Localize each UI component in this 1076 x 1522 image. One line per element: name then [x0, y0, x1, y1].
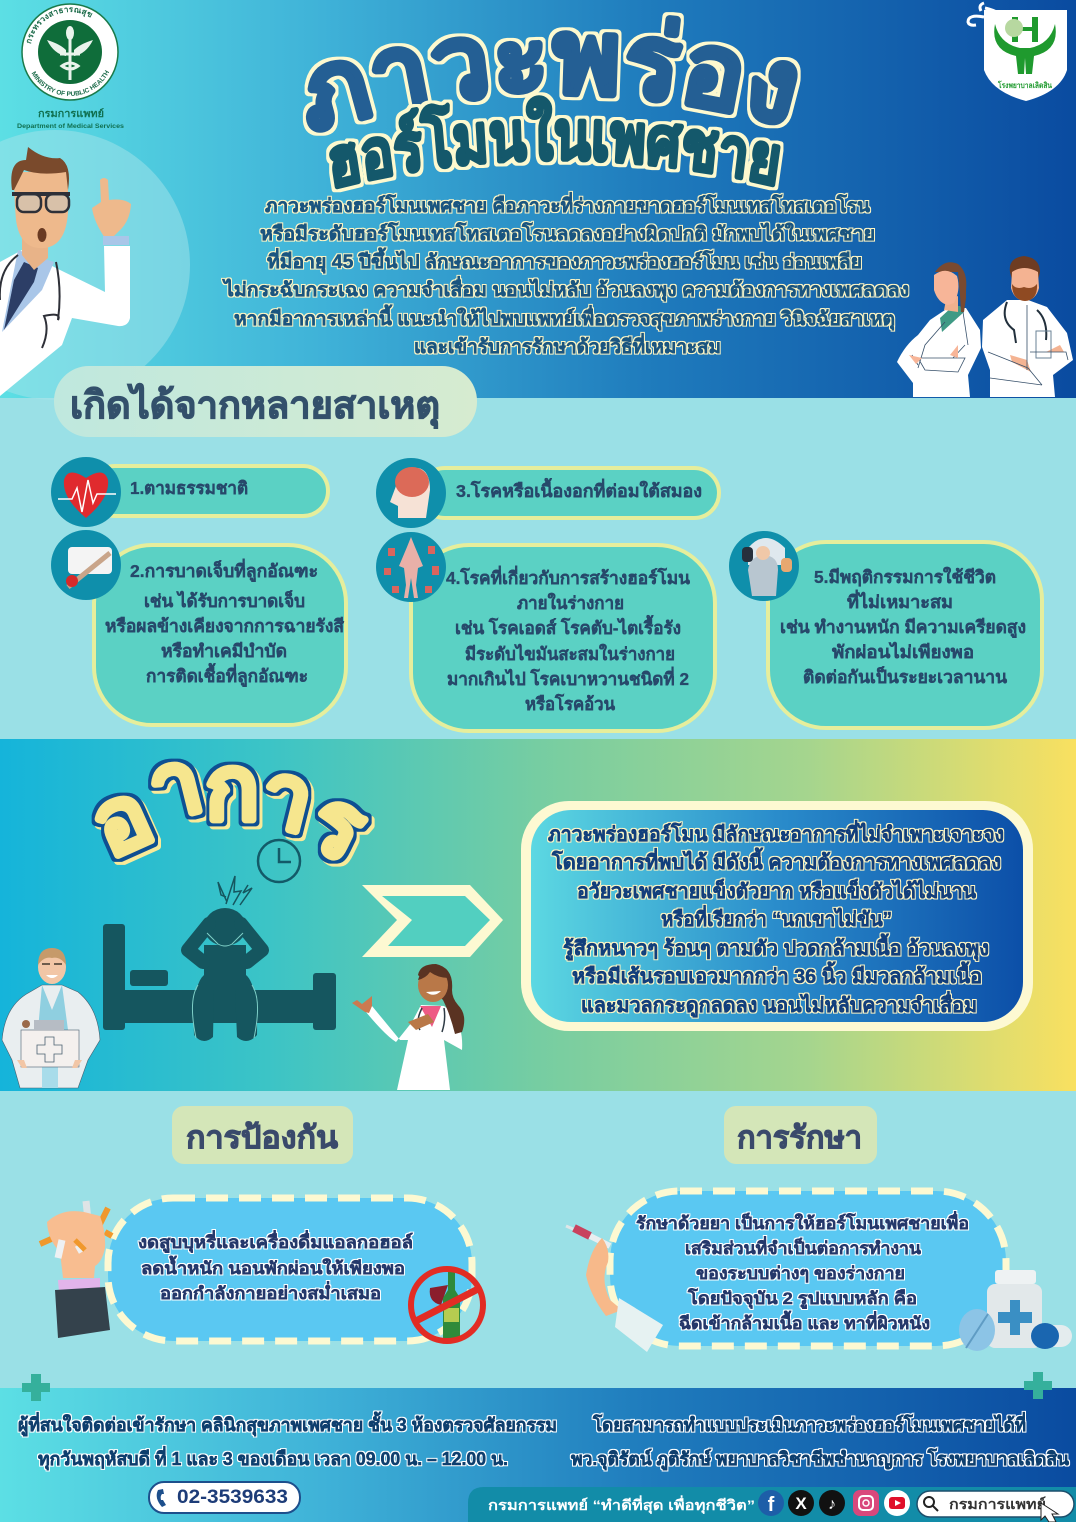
illustration: medicine bottle and pills [959, 1270, 1072, 1351]
title: main heading: ภาวะพร่อง [302, 12, 801, 136]
text block: contact details: ผู้ที่สนใจติดต่อเข้ารักษา คลินิกสุขภาพเพศชาย ชั้น 3 ห้องตรวจศัลยกรรม [18, 1411, 557, 1437]
text block: assessment contact: พว.จุติรัตน์ ภูติรักษ์ พยาบาลวิชาชีพชำนาญการ โรงพยาบาลเลิดสิน [571, 1448, 1070, 1471]
icon: plus left [22, 1374, 50, 1401]
panel: cause 1 [51, 457, 328, 527]
title: symptoms arched heading: า [250, 743, 323, 853]
male doctor [982, 256, 1073, 397]
icon: clock [258, 840, 300, 882]
panel: cause 2: หรือผลข้างเคียงจากการฉายรังสี [105, 616, 344, 636]
title: symptoms arched heading: า [139, 731, 212, 840]
heading: prevention: การป้องกัน [186, 1120, 338, 1155]
panel: cause 4 [376, 532, 715, 731]
female doctor [897, 256, 1073, 397]
text block: contact details: ทุกวันพฤหัสบดี ที่ 1 และ 3 ของเดือน เวลา 09.00 น. – 12.00 น. [38, 1446, 508, 1471]
illustration: hand holding syringe [566, 1226, 663, 1352]
icon: hospital shield logo: โรงพยาบาลเลิดสิน [997, 80, 1052, 90]
text block: intro paragraph: หากมีอาการเหล่านี้ แนะนำให้ไปพบแพทย์เพื่อตรวจสุขภาพร่างกาย วินิจฉัยสาเหตุ [234, 304, 895, 331]
callout: phone number: 02-3539633 [177, 1487, 288, 1508]
text block: treatment advice: โดยปัจจุบัน 2 รูปแบบหลัก คือ [687, 1288, 917, 1310]
panel: cause 4: มากเกินไป โรคเบาหวานชนิดที่ 2 [447, 666, 689, 689]
icon: ministry of public health seal [21, 3, 119, 101]
panel: cause 5: 5.มีพฤติกรรมการใช้ชีวิต [814, 566, 996, 587]
text block: assessment contact: โดยสามารถทำแบบประเมินภาวะพร่องฮอร์โมนเพศชายได้ที่ [592, 1412, 1026, 1435]
title: symptoms arched heading [76, 731, 382, 881]
icon: ministry of public health seal: MINISTRY OF PUBLIC HEALTH [32, 70, 110, 96]
text block: prevention advice [138, 1230, 413, 1303]
icon: tiktok: ♪ [828, 1496, 836, 1513]
panel: cause 2 [51, 530, 346, 725]
illustration: doctor pointing up [0, 130, 190, 400]
icon: tiktok [819, 1490, 845, 1516]
text: department name [17, 108, 124, 130]
panel: cause 5: พักผ่อนไม่เพียงพอ [832, 641, 974, 662]
icon: instagram [853, 1490, 879, 1516]
panel: footer background [0, 1388, 1076, 1522]
panel: cause 3 [376, 458, 719, 528]
icon: heartbeat [51, 457, 121, 527]
panel: cause 2: เช่น ได้รับการบาดเจ็บ [144, 589, 305, 611]
panel: symptoms description box [521, 801, 1033, 1031]
panel: cause 2: หรือทำเคมีบำบัด [161, 641, 287, 661]
text block: intro paragraph: และเข้ารับการรักษาด้วยวิธีที่เหมาะสม [414, 333, 721, 358]
text block: treatment advice: เสริมส่วนที่จำเป็นต่อการทำงาน [685, 1236, 921, 1258]
panel: cause 2: 2.การบาดเจ็บที่ลูกอัณฑะ [130, 558, 318, 583]
text block: symptoms description: โดยอาการที่พบได้ มีดังนี้ ความต้องการทางเพศลดลง [551, 847, 1001, 874]
panel: prevention capsule [108, 1198, 472, 1341]
text block: contact details [18, 1411, 557, 1471]
icon: plus right [1024, 1372, 1052, 1399]
text block: treatment advice: ฉีดเข้ากล้ามเนื้อ และ ทาที่ผิวหนัง [679, 1310, 930, 1333]
icon: x [788, 1490, 814, 1516]
title: sub heading: ฮอร์โมนในเพศชาย [326, 92, 784, 192]
arrow: chevron [362, 885, 503, 957]
icon: human anatomy [376, 532, 446, 602]
icon: brain [376, 458, 446, 528]
icon: facebook: f [768, 1494, 775, 1516]
text block: intro paragraph [222, 192, 909, 358]
text: department name: กรมการแพทย์ [38, 108, 104, 120]
heading: causes pill [54, 366, 477, 437]
text block: symptoms description: รู้สึกหนาวๆ ร้อนๆ ตามตัว ปวดกล้ามเนื้อ อ้วนลงพุง [563, 933, 989, 962]
icon: x: X [795, 1494, 807, 1513]
text block: symptoms description: ภาวะพร่องฮอร์โมน มีลักษณะอาการที่ไม่จำเพาะเจาะจง [548, 819, 1004, 846]
panel: social media bar: กรมการแพทย์ “ทำดีที่สุด เพื่อทุกชีวิต” [488, 1495, 755, 1514]
heading: treatment: การรักษา [737, 1120, 862, 1155]
text block: treatment advice: รักษาด้วยยา เป็นการให้ฮอร์โมนเพศชายเพื่อ [636, 1211, 969, 1233]
heading: treatment [724, 1106, 877, 1164]
text block: prevention advice: ออกกำลังกายอย่างสม่ำเสมอ [160, 1281, 381, 1303]
icon: ministry of public health seal: กระทรวงสาธารณสุข [26, 7, 92, 44]
text block: intro paragraph: หรือมีระดับฮอร์โมนเทสโทสเตอโรนลดลงอย่างผิดปกติ มักพบได้ในเพศชาย [260, 222, 875, 245]
panel: social media bar [468, 1487, 1076, 1522]
text block: assessment contact [571, 1412, 1070, 1471]
panel: cause 4: 4.โรคที่เกี่ยวกับการสร้างฮอร์โมน [446, 565, 690, 588]
panel: symptoms background [0, 739, 1076, 1091]
panel: cause 5 [729, 531, 1042, 728]
text block: symptoms description: หรือที่เรียกว่า “นกเขาไม่ขัน” [661, 904, 892, 931]
panel: cause 5: ติดต่อกันเป็นระยะเวลานาน [803, 665, 1007, 687]
text block: symptoms description: หรือมีเส้นรอบเอวมากกว่า 36 นิ้ว มีมวลกล้ามเนื้อ [572, 961, 982, 988]
panel: cause 1: 1.ตามธรรมชาติ [130, 478, 248, 498]
text block: prevention advice: ลดน้ำหนัก นอนพักผ่อนให้เพียงพอ [141, 1255, 405, 1278]
panel: cause 4: ภายในร่างกาย [517, 592, 624, 613]
search box [917, 1491, 1074, 1522]
text block: treatment advice [636, 1211, 969, 1333]
text block: intro paragraph: ไม่กระฉับกระเฉง ความจำเสื่อม นอนไม่หลับ อ้วนลงพุง ความต้องการทางเพศลดลง [222, 276, 909, 302]
panel: cause 5: ที่ไม่เหมาะสม [847, 589, 953, 612]
text block: symptoms description: อวัยวะเพศชายแข็งตัวยาก หรือแข็งตัวได้ไม่นาน [577, 878, 976, 903]
icon: person with masks [729, 531, 799, 601]
panel: cause 4: เช่น โรคเอดส์ โรคตับ-ไตเรื้อรัง [455, 615, 681, 638]
icon: hospital shield logo [968, 3, 1067, 101]
panel: cause 2: การติดเชื้อที่ลูกอัณฑะ [146, 663, 308, 688]
text block: prevention advice: งดสูบบุหรี่และเครื่องดื่มแอลกอฮอล์ [138, 1230, 413, 1254]
title: symptoms arched heading: อ [76, 764, 167, 877]
panel: cause 4: หรือโรคอ้วน [525, 693, 615, 714]
panel: header background [0, 0, 1076, 398]
icon: facebook [758, 1490, 784, 1516]
title: symptoms arched heading: ก [205, 739, 260, 839]
illustration: female doctor presenting [352, 964, 464, 1090]
illustration: doctor holding medical box [2, 948, 100, 1088]
heading: prevention [172, 1106, 353, 1164]
panel: prevention and treatment background [0, 1091, 1076, 1388]
illustration: person with headache on bed [103, 876, 336, 1041]
illustration: hand crushing cigarettes [40, 1201, 112, 1338]
illustration: two doctors with crossed arms [897, 256, 1073, 397]
icon: youtube [884, 1490, 910, 1516]
text block: intro paragraph: ภาวะพร่องฮอร์โมนเพศชาย คือภาวะที่ร่างกายขาดฮอร์โมนเทสโทสเตอโรน [265, 192, 870, 217]
text: department name: Department of Medical Services [17, 123, 124, 130]
text block: symptoms description: และมวลกระดูกลดลง นอนไม่หลับความจำเสื่อม [581, 990, 977, 1019]
text block: treatment advice: ของระบบต่างๆ ของร่างกาย [696, 1264, 905, 1283]
icon: injury thermometer [51, 530, 121, 600]
panel: cause 4: มีระดับไขมันสะสมในร่างกาย [465, 643, 675, 664]
title: symptoms arched heading: ร [294, 770, 382, 881]
search box: กรมการแพทย์ [949, 1496, 1046, 1512]
callout: phone number [149, 1482, 300, 1513]
heading: causes pill: เกิดได้จากหลายสาเหตุ [70, 383, 440, 429]
panel: treatment capsule [610, 1191, 1006, 1346]
text block: symptoms description [548, 819, 1004, 1019]
icon: no alcohol sign [411, 1269, 483, 1341]
panel: causes background [0, 398, 1076, 740]
panel: cause 3: 3.โรคหรือเนื้องอกที่ต่อมใต้สมอง [456, 478, 702, 501]
text block: intro paragraph: ที่มีอายุ 45 ปีขึ้นไป ลักษณะอาการของภาวะพร่องฮอร์โมน เช่น อ่อนเพลีย [267, 247, 862, 274]
panel: cause 5: เช่น ทำงานหนัก มีความเครียดสูง [780, 617, 1026, 639]
